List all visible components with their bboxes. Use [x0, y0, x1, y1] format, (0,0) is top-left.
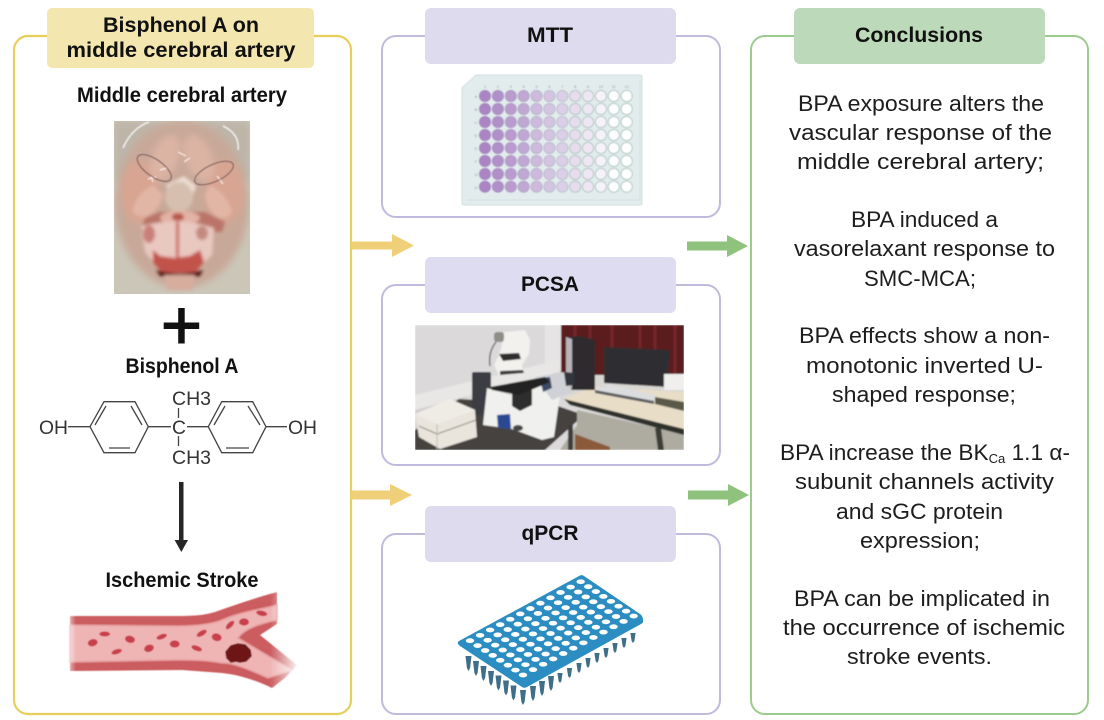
chemical structure: bisphenol A: OH — [288, 417, 317, 439]
illustration: 96-well plate with purple gradient: 7 — [561, 84, 564, 89]
conclusion 4 — [780, 440, 1070, 553]
conclusion 3: shaped response; — [832, 382, 1016, 407]
illustration: 96-well plate with purple gradient: 4 — [522, 84, 525, 89]
illustration: 96-well plate with purple gradient: 3 — [510, 84, 513, 89]
illustration: 96-well plate with purple gradient: 8 — [574, 84, 577, 89]
conclusion 2: SMC-MCA; — [864, 266, 976, 291]
conclusion 5: the occurrence of ischemic — [783, 615, 1065, 640]
heading: Conclusions: Conclusions — [855, 24, 983, 47]
chemical structure: bisphenol A: OH — [39, 417, 68, 439]
arrow: green upper — [687, 235, 748, 257]
monitor — [604, 347, 670, 387]
microscope body — [483, 385, 560, 440]
back of room — [573, 374, 661, 394]
label: Bisphenol A: Bisphenol A — [126, 355, 238, 378]
conclusion 1: middle cerebral artery; — [797, 149, 1044, 174]
illustration: 96-well plate with purple gradient: 2 — [497, 84, 500, 89]
conclusion 4: expression; — [860, 528, 980, 553]
chemical structure: bisphenol A: CH3 — [172, 388, 211, 410]
icon: blood clot — [226, 644, 251, 662]
conclusion 4: and sGC protein — [836, 499, 1003, 524]
conclusion 1: vascular response of the — [789, 120, 1052, 145]
heading: qPCR: qPCR — [522, 522, 578, 545]
conclusion 2: BPA induced a — [851, 207, 998, 232]
microscope head — [494, 330, 530, 375]
illustration: 96-well plate with purple gradient: C — [475, 120, 478, 125]
illustration: 96-well plate with purple gradient: B — [475, 107, 478, 112]
conclusion 2: vasorelaxant response to — [794, 236, 1055, 261]
panel: PCSA — [382, 257, 720, 465]
conclusion 4: BPA increase the BK — [780, 440, 987, 465]
outline ellipses marking the arteries — [136, 154, 234, 186]
arrow: yellow lower — [351, 484, 412, 506]
panel: Conclusions — [751, 8, 1088, 714]
conclusion 5: stroke events. — [847, 644, 992, 669]
illustration: 96-well plate with purple gradient: G — [474, 172, 478, 177]
illustration: 96-well plate with purple gradient: 11 — [612, 84, 617, 89]
bench — [415, 399, 584, 450]
conclusion 4: 1.1 α- — [1005, 440, 1070, 465]
illustration: 96-well plate with purple gradient: 9 — [587, 84, 590, 89]
heading: MTT — [425, 8, 676, 64]
arrow: yellow upper — [351, 234, 414, 257]
conclusion 3: BPA effects show a non- — [799, 323, 1050, 348]
illustration: 96-well plate with purple gradient: 5 — [535, 84, 538, 89]
illustration: 96-well plate with purple gradient: 12 — [624, 84, 630, 89]
panel: qPCR — [382, 506, 720, 714]
illustration: 96-well plate with purple gradient: H — [475, 185, 478, 190]
illustration: 96-well plate with purple gradient: 6 — [548, 84, 551, 89]
conclusion 1 — [789, 91, 1052, 174]
label: Ischemic Stroke: Ischemic Stroke — [106, 569, 258, 592]
heading: Bisphenol A on middle cerebral artery: middle cerebral artery — [66, 39, 296, 62]
conclusion 3 — [799, 323, 1050, 407]
arrow: green lower — [688, 484, 749, 506]
illustration: 96-well plate with purple gradient: D — [475, 133, 478, 138]
illustration: 96-well plate with purple gradient: F — [475, 159, 478, 164]
arrow: bisphenol A leads to ischemic stroke — [175, 482, 188, 552]
heading: qPCR — [425, 506, 676, 562]
illustration: 96-well plate with purple gradient: 10 — [599, 84, 604, 89]
label: Middle cerebral artery: Middle cerebral artery — [77, 84, 287, 107]
heading: Bisphenol A on middle cerebral artery: Bisphenol A on — [103, 14, 259, 37]
photo: microscope laboratory setup — [415, 325, 684, 450]
heading: PCSA: PCSA — [521, 273, 579, 296]
photo: brain with middle cerebral artery — [114, 120, 250, 294]
chemical structure: bisphenol A: CH3 — [172, 447, 211, 469]
illustration: blue PCR plate — [458, 575, 643, 705]
desk — [564, 387, 684, 429]
tower — [566, 336, 595, 390]
conclusion 1: BPA exposure alters the — [798, 91, 1044, 116]
heading: PCSA — [425, 257, 676, 313]
panel: MTT — [382, 8, 720, 217]
illustration: 96-well plate with purple gradient — [462, 75, 642, 205]
chemical structure: bisphenol A — [39, 388, 317, 469]
heading: Bisphenol A on middle cerebral artery — [47, 8, 314, 68]
illustration: 96-well plate with purple gradient: E — [475, 146, 478, 151]
black cylinder — [472, 372, 491, 415]
illustration: 96-well plate with purple gradient: A — [475, 94, 478, 99]
conclusion 4: subunit channels activity — [795, 469, 1055, 494]
boxes — [415, 408, 478, 450]
conclusion 2 — [794, 207, 1055, 291]
keyboard and pad — [596, 384, 656, 402]
conclusion 3: monotonic inverted U- — [806, 353, 1043, 378]
chemical structure: bisphenol A: C — [172, 417, 186, 439]
illustration: blood vessel with clot — [66, 585, 300, 693]
conclusion 5: BPA can be implicated in — [794, 586, 1050, 611]
icon: plus sign — [164, 308, 199, 344]
panel: Bisphenol A on middle cerebral artery — [14, 8, 351, 714]
conclusion 4: Ca — [989, 451, 1006, 466]
conclusion 5 — [783, 586, 1065, 669]
heading: MTT: MTT — [527, 24, 573, 47]
illustration: 96-well plate with purple gradient: 1 — [484, 84, 487, 89]
heading: Conclusions — [794, 8, 1045, 64]
